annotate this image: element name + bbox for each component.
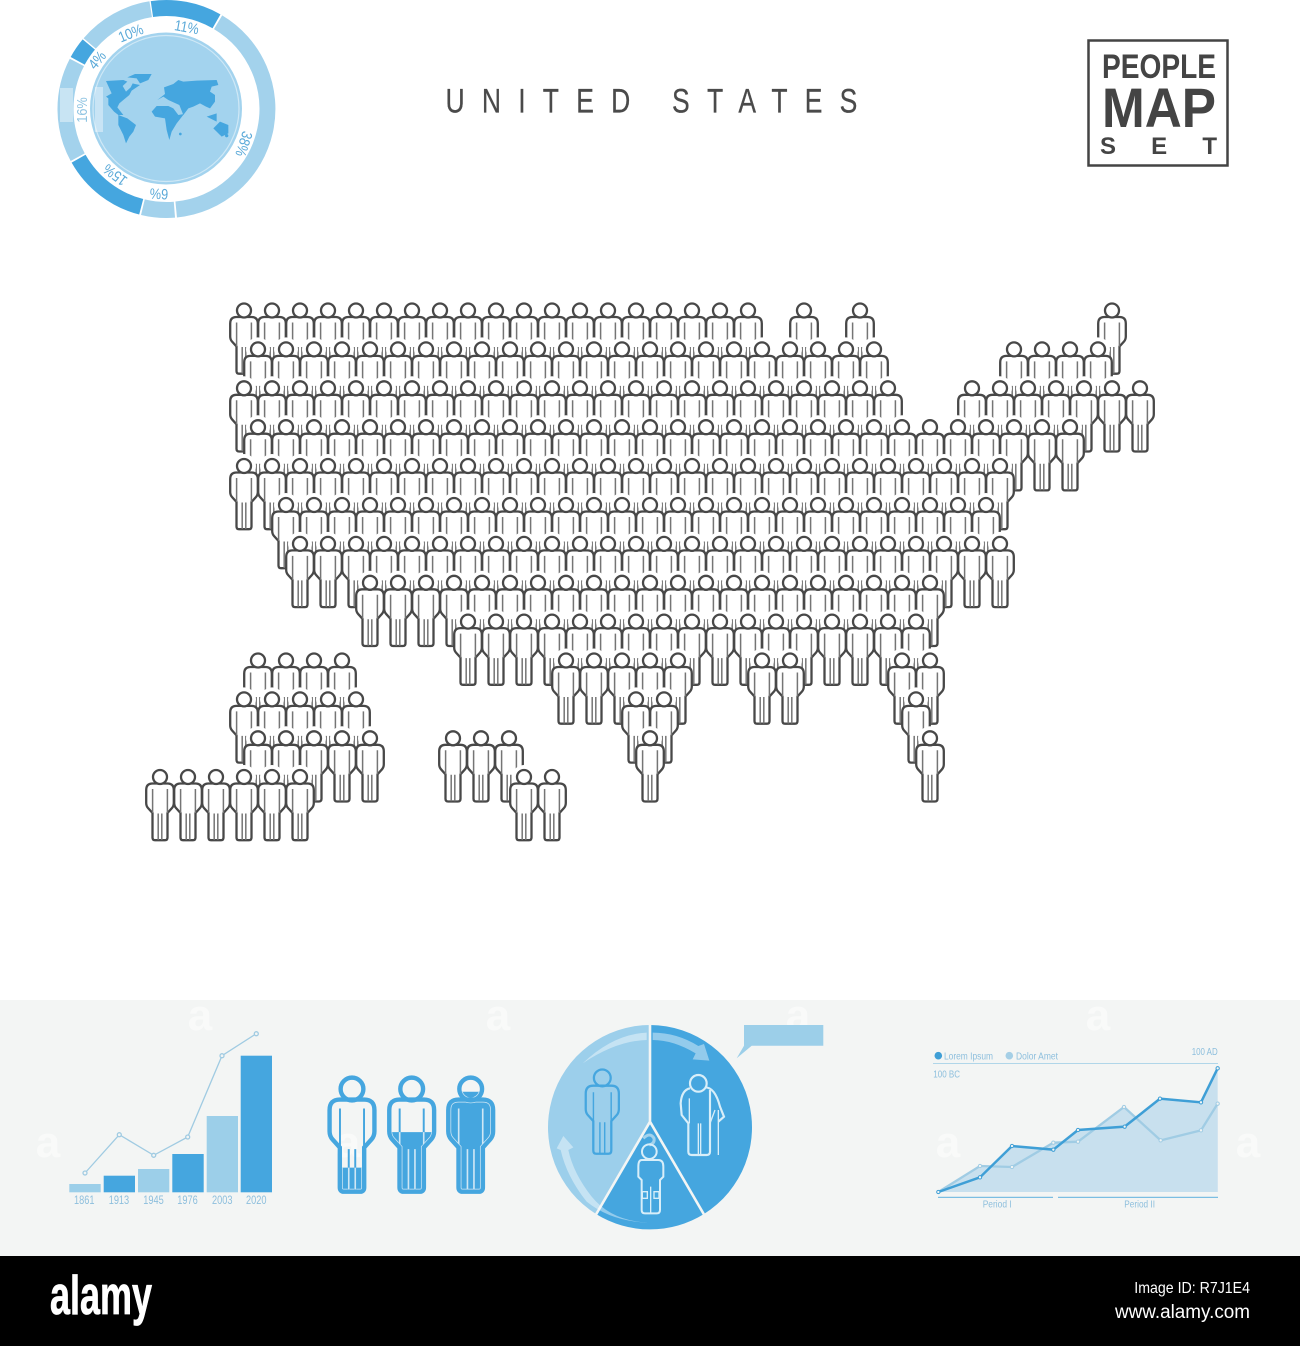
badge: people map set: MAP [1102, 76, 1216, 139]
area line chart [933, 1046, 1219, 1211]
top rule and range labels: 100 AD [1192, 1046, 1218, 1058]
image id: Image ID: R7J1E4 [1134, 1280, 1250, 1297]
legend [934, 1050, 1058, 1062]
donut percentage labels: 16% [73, 97, 90, 123]
top rule and range labels [933, 1046, 1218, 1081]
website: www.alamy.com [1114, 1302, 1250, 1323]
donut percentage labels: 4% [84, 47, 109, 73]
person filled to head [448, 1078, 493, 1192]
alamy logo: alamy [50, 1264, 152, 1326]
year labels: 1976 [177, 1193, 198, 1207]
badge: people map set: SET [1100, 133, 1217, 160]
legend: Lorem Ipsum [944, 1050, 993, 1062]
text: a [1086, 991, 1111, 1040]
period axis [938, 1197, 1218, 1211]
text: a [486, 991, 511, 1040]
badge: people map set: PEOPLE [1102, 48, 1216, 86]
year labels: 1861 [74, 1193, 95, 1207]
contiguous states [230, 298, 1154, 802]
year labels [74, 1193, 267, 1207]
person filled to legs [330, 1078, 374, 1192]
bottom band [0, 1000, 1300, 1256]
donut percentage labels: 10% [116, 20, 146, 46]
elderly icon [681, 1075, 724, 1155]
segment dividers [596, 1025, 704, 1214]
dark series [937, 1067, 1219, 1194]
text: a [336, 1118, 361, 1167]
donut chart with world map [65, 8, 267, 210]
donut percentage labels: 15% [100, 161, 130, 190]
people map of the United States [146, 298, 1154, 840]
year labels: 2020 [246, 1193, 267, 1207]
trend line [83, 1032, 258, 1175]
donut percentage labels: 6% [149, 185, 169, 203]
legend: Dolor Amet [1016, 1050, 1058, 1062]
donut percentage labels: 38% [232, 129, 256, 159]
bars [69, 1056, 272, 1192]
year labels: 1945 [143, 1193, 164, 1207]
top rule and range labels: 100 BC [933, 1069, 960, 1081]
text: a [1236, 1118, 1261, 1167]
year labels: 2003 [212, 1193, 233, 1207]
pie chart with age groups [548, 1025, 823, 1229]
Alaska [146, 648, 384, 840]
text: a [188, 991, 213, 1040]
pie right segment [650, 1025, 752, 1214]
speech bubble callout [737, 1025, 823, 1058]
filled areas [938, 1068, 1218, 1192]
donut segments [65, 8, 267, 210]
child icon [638, 1135, 663, 1213]
pie left segment [548, 1025, 650, 1214]
light series [938, 1102, 1219, 1192]
text: a [786, 991, 811, 1040]
year labels: 1913 [109, 1193, 129, 1207]
text: a [36, 1118, 61, 1167]
donut percentage labels: 11% [173, 16, 200, 37]
title: UNITED STATES [446, 82, 857, 120]
bar and line chart [69, 1032, 272, 1207]
adult icon [586, 1070, 619, 1154]
pie bottom segment [596, 1122, 704, 1229]
donut percentage labels [73, 16, 256, 203]
inner disc [90, 32, 242, 184]
Hawaii [439, 726, 566, 840]
three fill-level person icons [330, 1078, 493, 1192]
world map [106, 74, 228, 143]
badge: people map set [1088, 40, 1228, 166]
circular arrows [557, 1033, 709, 1223]
black footer bar [0, 1256, 1300, 1346]
person filled to waist [389, 1078, 434, 1192]
text: a [936, 1118, 961, 1167]
period axis: Period I [983, 1199, 1012, 1211]
period axis: Period II [1124, 1199, 1155, 1211]
